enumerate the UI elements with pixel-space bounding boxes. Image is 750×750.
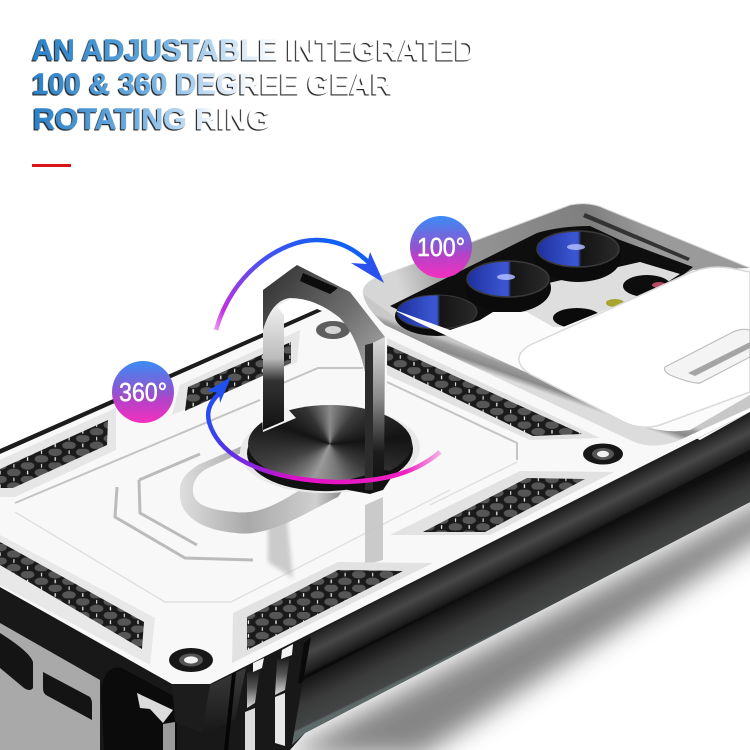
phone case illustration (0, 204, 750, 750)
kickstand inner (193, 454, 298, 512)
ring holder recess (239, 404, 421, 496)
honeycomb: top left (0, 420, 108, 488)
camera window (390, 226, 693, 335)
left panel line (15, 400, 260, 503)
kickstand stadium (180, 446, 342, 534)
module frame (363, 204, 750, 320)
honeycomb bevel: top left (0, 408, 116, 497)
honeycomb bevel: right top (387, 338, 600, 440)
honeycomb: top mid (185, 342, 291, 411)
upper octagon (139, 454, 200, 480)
screw: bottom (169, 648, 213, 672)
sweep (208, 392, 440, 482)
ring disc (248, 405, 412, 483)
arrow: 100 degree (216, 240, 384, 330)
screw: top (316, 321, 350, 339)
side cutout 1 (0, 633, 33, 690)
gray relief lines (15, 368, 517, 503)
port black surround (101, 668, 177, 750)
badge: 100 (410, 216, 472, 278)
upper slit 1 (247, 672, 259, 708)
case side gray (0, 623, 100, 750)
bumper white square 1 (253, 658, 264, 672)
seam 2 (298, 637, 311, 684)
ring shadow strip 1 (266, 522, 294, 578)
arch face (263, 265, 385, 420)
lens: 1 (397, 295, 477, 329)
upper slit 2 (275, 658, 289, 695)
honeycomb: lower centre (247, 570, 403, 650)
screw: right (583, 444, 623, 464)
lens: 3 (537, 231, 619, 267)
honeycomb bevel: right centre (390, 471, 614, 535)
red sensor (652, 282, 666, 288)
flash lens (623, 275, 671, 297)
base clip (333, 470, 395, 494)
seam 1 (224, 672, 236, 750)
arc (216, 240, 376, 330)
lower slit 2 (275, 693, 285, 746)
body upper band (303, 412, 750, 680)
bumper facet (205, 668, 246, 718)
case dark base (0, 412, 750, 750)
plate panel lines (15, 462, 517, 602)
module inner plate (500, 262, 680, 330)
octagon relief (115, 454, 253, 560)
slider panel (519, 267, 750, 427)
title line 3: ROTATING RING (33, 103, 271, 136)
badge: 360: 360° (119, 377, 167, 407)
top panel line (283, 368, 363, 383)
inner octagon (139, 480, 197, 545)
arch slot (300, 273, 338, 294)
lens: 2 (467, 261, 549, 297)
ring holder (239, 265, 421, 496)
ring disc edge (246, 408, 414, 494)
lower slit 1 (245, 708, 255, 750)
arch inner surface (263, 294, 372, 420)
corner facet (173, 696, 177, 722)
small lens (553, 308, 601, 328)
honeycomb: lower left (0, 542, 144, 649)
honeycomb bevel: top mid (172, 330, 300, 415)
port lower gray (163, 722, 175, 750)
panel right line (430, 462, 517, 505)
badge: 100: 100° (417, 232, 465, 262)
title line 1: AN ADJUSTABLE INTEGRATED (32, 34, 476, 67)
port opening (137, 693, 173, 723)
title line 2: 100 & 360 DEGREE GEAR (32, 68, 392, 101)
honeycomb: right centre (423, 478, 585, 532)
right panel line (387, 382, 517, 460)
honeycomb bevel: lower left (0, 535, 155, 665)
arrowhead (351, 252, 384, 283)
front leg inner (365, 343, 373, 490)
arrow: 360 degree (207, 377, 440, 482)
slider handle (665, 329, 750, 383)
white slider body (392, 268, 750, 431)
black top edge (0, 309, 322, 454)
title (32, 34, 476, 136)
red accent bar (32, 164, 71, 167)
yellow sensor (606, 299, 624, 307)
camera module (363, 204, 750, 446)
arrowhead (207, 377, 231, 403)
lens back: 1 (395, 296, 479, 336)
corner bumper (202, 637, 311, 750)
disc notch (262, 407, 296, 432)
bumper white square 2 (281, 644, 293, 659)
side cutout 2 (43, 672, 92, 720)
body lower band (292, 450, 750, 745)
slider handle groove (688, 342, 750, 376)
honeycomb bevel: lower centre (232, 562, 433, 663)
lens glint: 2 (497, 274, 515, 280)
ring shadow strip 2 (365, 497, 383, 565)
outer octagon (115, 487, 253, 560)
inner left leg (263, 300, 284, 430)
honeycomb: right top (387, 345, 582, 436)
lens glint: 3 (567, 244, 585, 250)
white back plate (0, 412, 749, 684)
drop shadow under phone (280, 492, 750, 750)
lens back: 2 (465, 263, 551, 313)
badge: 360 (112, 361, 174, 423)
module lower band (363, 293, 750, 446)
lower panel outline (15, 490, 450, 602)
frame dark slot (583, 213, 690, 261)
lens back: 3 (535, 234, 621, 282)
front leg (373, 337, 385, 490)
